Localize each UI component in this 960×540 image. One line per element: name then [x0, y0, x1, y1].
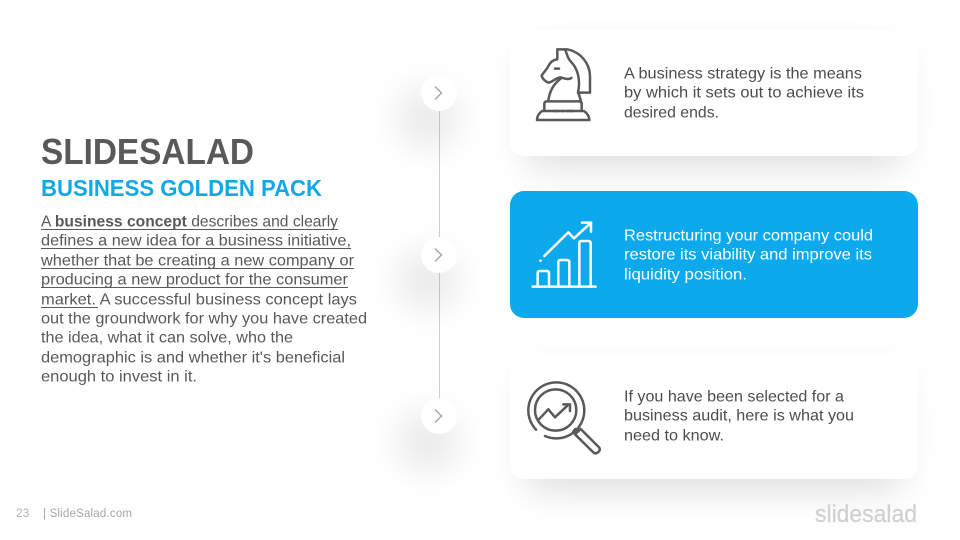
timeline node 2: [398, 237, 458, 310]
card 3 text: need to know.: [624, 428, 724, 444]
card 1: strategy: [510, 30, 918, 168]
icon: growth bar chart: [533, 223, 596, 287]
card 3 text: business audit, here is what you: [624, 408, 854, 424]
body paragraph: out the groundwork for why you have created: [41, 310, 367, 328]
body paragraph: the idea, what it can solve, who the: [41, 330, 293, 346]
timeline node 3: [398, 398, 458, 471]
card 1 text: by which it sets out to achieve its: [624, 84, 864, 102]
footer page number: 23: [16, 506, 30, 520]
timeline connector line: [438, 111, 440, 398]
timeline node 1: [398, 75, 458, 148]
card 2 text: liquidity position.: [624, 266, 747, 284]
body paragraph: demographic is and whether it's beneficial: [41, 350, 345, 366]
body paragraph: whether that be creating a new company or: [40, 252, 355, 270]
card 1 text: desired ends.: [624, 104, 719, 122]
card 3 text: If you have been selected for a: [624, 388, 844, 406]
body paragraph: enough to invest in it.: [41, 368, 197, 386]
subtitle: BUSINESS GOLDEN PACK: [41, 175, 322, 201]
body paragraph: producing a new product for the consumer: [41, 272, 349, 288]
icon: chess knight: [537, 49, 590, 120]
card 3 text: [624, 388, 854, 444]
title: SLIDESALAD: [41, 131, 254, 172]
card 1 text: [624, 66, 864, 122]
card 2 text: [624, 228, 873, 284]
card 1 text: A business strategy is the means: [624, 66, 862, 82]
body paragraph: A business concept describes and clearly: [41, 214, 338, 230]
body paragraph: market. A successful business concept lays: [41, 292, 357, 308]
footer logo wordmark: slidesalad: [815, 501, 917, 528]
card 3: audit: [510, 353, 918, 491]
body paragraph: [40, 214, 367, 386]
card 2: restructuring (highlighted): [510, 191, 918, 318]
body paragraph: defines a new idea for a business initiative,: [41, 232, 351, 250]
icon: magnifying glass with trend: [528, 382, 600, 453]
footer site label: | SlideSalad.com: [43, 508, 132, 520]
card 2 text: restore its viability and improve its: [624, 246, 872, 264]
card 2 text: Restructuring your company could: [624, 228, 873, 244]
